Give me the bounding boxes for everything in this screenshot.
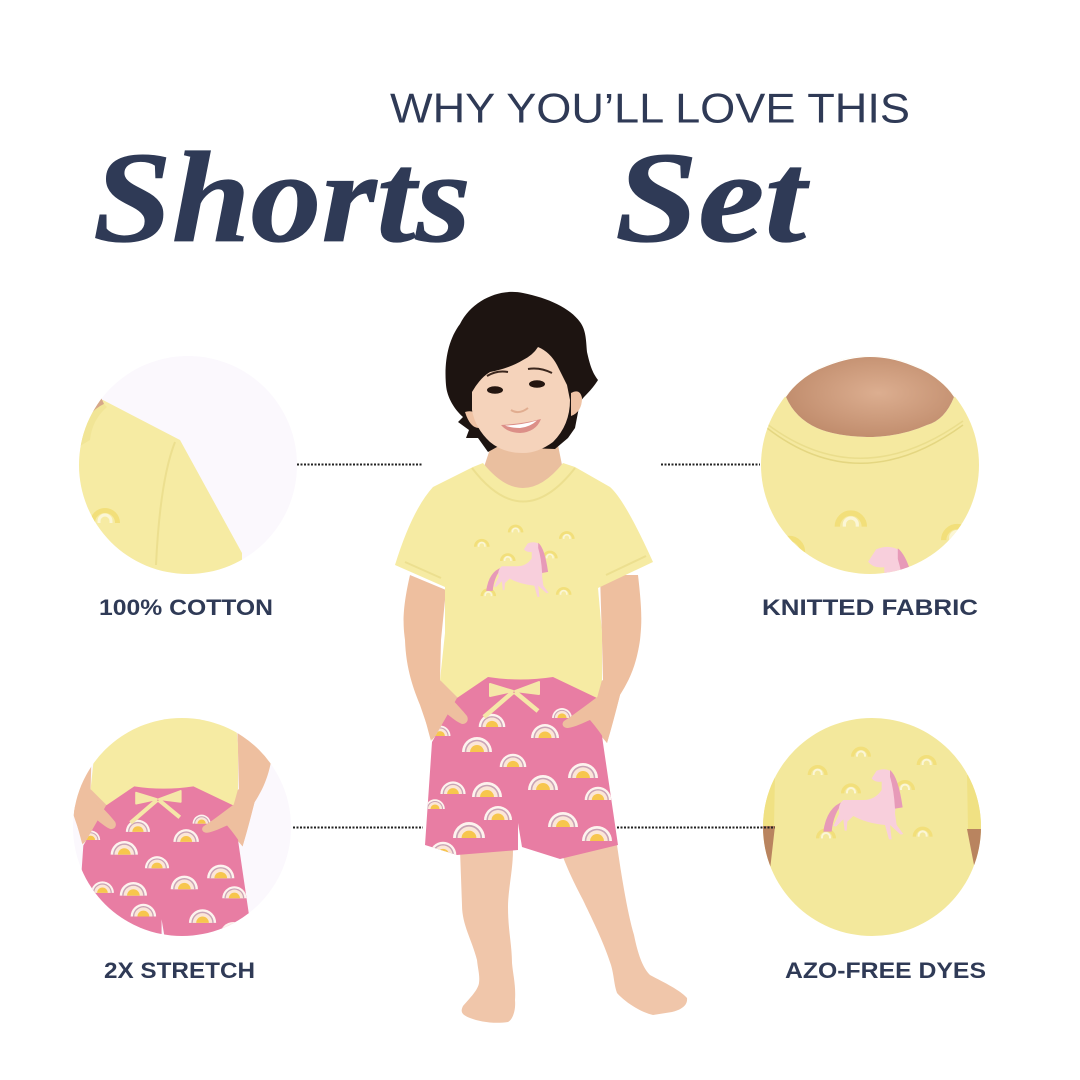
shirt collar and hems bbox=[405, 468, 646, 578]
smile bbox=[501, 419, 541, 433]
panel: azo-free dyes bbox=[760, 715, 986, 983]
face bbox=[472, 347, 570, 453]
sleeve close-up bbox=[70, 395, 242, 575]
title: Shorts Set bbox=[93, 126, 810, 270]
connector lines bbox=[293, 464, 775, 828]
label: AZO-FREE DYES bbox=[785, 958, 986, 983]
heading: why you'll love this: WHY YOU’LL LOVE THIS bbox=[390, 84, 910, 132]
panel: 2x stretch bbox=[74, 718, 271, 978]
print close-up bbox=[760, 715, 985, 940]
eyes and brows bbox=[487, 368, 552, 394]
panel: 100% cotton bbox=[79, 398, 272, 615]
title: Shorts Set: Set bbox=[615, 126, 810, 270]
nose bbox=[511, 408, 528, 412]
infographic canvas bbox=[74, 93, 986, 1023]
body, shirt and shorts bbox=[395, 463, 687, 1023]
neck bbox=[483, 440, 563, 495]
waistband close-up bbox=[74, 718, 271, 936]
shirt print: unicorn bbox=[475, 526, 573, 597]
label: 2X STRETCH bbox=[104, 958, 255, 983]
hair bbox=[446, 292, 598, 452]
neckline close-up bbox=[761, 356, 979, 574]
label: KNITTED FABRIC bbox=[762, 595, 978, 620]
ears bbox=[465, 391, 582, 428]
panel: knitted fabric bbox=[761, 356, 979, 615]
title: Shorts Set: Shorts bbox=[93, 126, 471, 270]
model: child in shorts set bbox=[395, 292, 687, 1023]
label: 100% COTTON bbox=[99, 595, 273, 620]
